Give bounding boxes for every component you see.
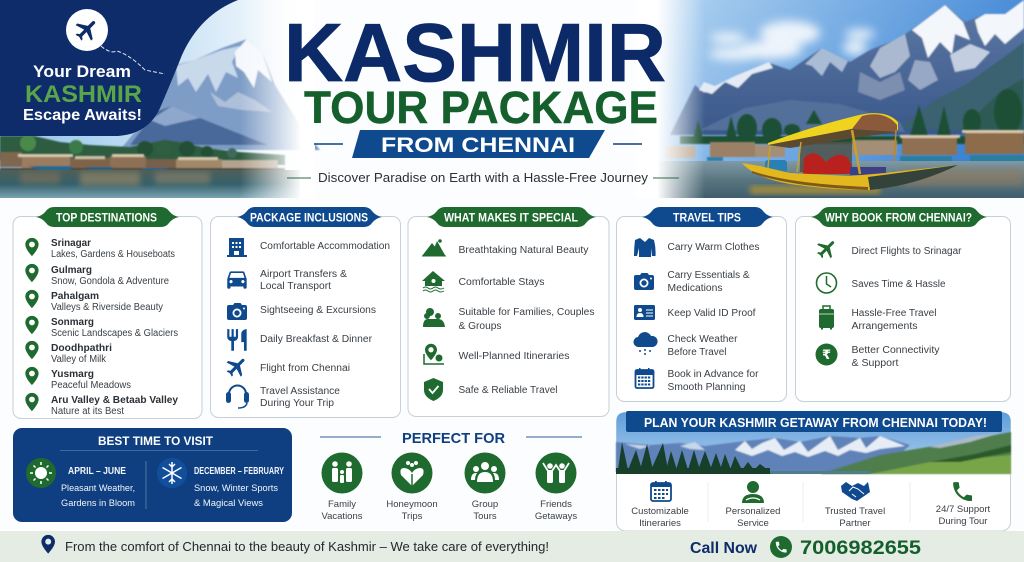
- shikara boat: [742, 113, 958, 190]
- panel: best time to visit: [13, 428, 292, 522]
- icon: plane: [813, 235, 840, 262]
- season: december to february: [194, 466, 284, 509]
- audience: friends getaways: Friends: [540, 499, 572, 510]
- panel: package inclusions: Local Transport: [260, 281, 331, 292]
- panel: what makes it special: Safe & Reliable Travel: [458, 385, 558, 396]
- heading: what makes it special: [427, 207, 596, 227]
- panel: package inclusions: [210, 207, 400, 418]
- panel: what makes it special: Breathtaking Natural Beauty: [458, 245, 588, 256]
- panel: travel tips: Before Travel: [668, 347, 726, 358]
- heading: package inclusions: [237, 207, 382, 227]
- banner heading: [626, 411, 1002, 432]
- destination list: Sonmarg: [51, 316, 94, 328]
- icon: car: [227, 271, 247, 289]
- panel: why book from Chennai: Better Connectivity: [852, 345, 940, 356]
- call to action: [690, 536, 921, 559]
- tree line: [0, 135, 285, 165]
- panel: travel tips: Check Weather: [668, 334, 738, 345]
- heading: perfect for: PERFECT FOR: [402, 430, 505, 447]
- destination list: Pahalgam: [51, 290, 99, 302]
- panel: plan your getaway: [616, 411, 1011, 531]
- footer bar: [0, 531, 1024, 562]
- destination list: Valleys & Riverside Beauty: [51, 302, 163, 313]
- heading: top destinations: [36, 207, 179, 227]
- panel: travel tips: Carry Warm Clothes: [668, 242, 760, 253]
- feature: customizable itineraries: Itineraries: [639, 518, 681, 529]
- panel: package inclusions: Comfortable Accommodation: [260, 241, 390, 252]
- destination list: Nature at its Best: [51, 406, 124, 417]
- season: december to february: & Magical Views: [194, 498, 263, 509]
- tagline: Discover Paradise on Earth with a Hassle-Free Journey: [318, 171, 649, 185]
- banner heading: PLAN YOUR KASHMIR GETAWAY FROM CHENNAI TODAY!: [644, 415, 987, 430]
- heading: best time: BEST TIME TO VISIT: [98, 436, 213, 448]
- audience: friends getaways: [535, 452, 577, 522]
- icon: sun: [26, 458, 56, 488]
- icon: snowflake: [157, 458, 187, 488]
- audience: family vacations: Vacations: [321, 511, 363, 522]
- panel: why book from Chennai: Direct Flights to Srinagar: [852, 246, 962, 257]
- icon: jacket: [634, 238, 656, 257]
- panel: what makes it special: Suitable for Families, Couples: [458, 307, 594, 318]
- feature: customizable itineraries: Customizable: [631, 506, 689, 517]
- subtitle ribbon: from Chennai: FROM CHENNAI: [381, 134, 575, 157]
- call to action: 7006982655: [800, 538, 921, 559]
- panel: travel tips: [616, 207, 786, 402]
- destination list: Snow, Gondola & Adventure: [51, 276, 169, 287]
- heading: why book from Chennai: WHY BOOK FROM CHENNAI?: [825, 212, 972, 224]
- icon: shield: [424, 378, 443, 401]
- icon: location pin: [41, 535, 55, 554]
- season: april to june: Gardens in Bloom: [61, 498, 135, 509]
- panel: why book from Chennai: Saves Time & Hassle: [852, 279, 946, 290]
- lake: [0, 170, 310, 198]
- panel: why book from Chennai: Hassle-Free Travel: [852, 308, 936, 319]
- audience: family vacations: Family: [328, 499, 356, 510]
- panel: travel tips: Carry Essentials &: [668, 270, 750, 281]
- icon: weather cloud: [633, 332, 658, 355]
- feature: personalized service: [726, 481, 780, 529]
- feature: 24/7 support: During Tour: [939, 516, 987, 527]
- feature: personalized service: Service: [737, 518, 769, 529]
- heading: what makes it special: WHAT MAKES IT SPECIAL: [444, 212, 578, 224]
- left scenery: mountain and lake: [0, 0, 320, 198]
- trees: [680, 89, 1024, 144]
- icon: cutlery: [227, 329, 247, 351]
- panel: what makes it special: & Groups: [458, 321, 502, 332]
- destination list: Valley of Milk: [51, 354, 107, 365]
- panel: travel tips: Medications: [668, 283, 722, 294]
- icon: hotel: [227, 238, 247, 257]
- title: KASHMIR: [284, 6, 666, 99]
- season: april to june: [61, 466, 135, 509]
- icon: house on water: [422, 271, 445, 292]
- feature: trusted travel partner: Trusted Travel: [825, 506, 885, 517]
- panel: why book from Chennai: Arrangements: [852, 321, 918, 332]
- dashed flight path: [101, 46, 165, 74]
- icon: map pin planning: [424, 344, 444, 364]
- navy corner badge: [0, 0, 238, 136]
- feature: trusted travel partner: [825, 482, 885, 529]
- heading: package inclusions: PACKAGE INCLUSIONS: [250, 212, 368, 224]
- icon: rupee: [816, 344, 838, 366]
- panel: travel tips: Book in Advance for: [668, 369, 759, 380]
- heading: travel tips: TRAVEL TIPS: [673, 212, 741, 224]
- destination list: Yusmarg: [51, 368, 94, 380]
- feature: 24/7 support: [936, 482, 991, 527]
- icon: suitcase: [819, 306, 834, 330]
- audience: group tours: [464, 452, 506, 522]
- icon: ID card: [634, 305, 655, 320]
- audience: honeymoon trips: Honeymoon: [386, 499, 438, 510]
- feature: customizable itineraries: [631, 481, 689, 529]
- icon: camera: [227, 303, 247, 320]
- destination list: Srinagar: [51, 237, 91, 249]
- icon: mountains: [422, 239, 446, 256]
- destination list: Doodhpathri: [51, 342, 112, 354]
- lake water: [640, 161, 1024, 198]
- audience: honeymoon trips: Trips: [402, 511, 423, 522]
- landscape photo strip: [616, 412, 1011, 474]
- destination list: [25, 237, 178, 417]
- icon: airplane in circle: [66, 9, 108, 51]
- audience: friends getaways: Getaways: [535, 511, 577, 522]
- destination list: Lakes, Gardens & Houseboats: [51, 249, 175, 260]
- panel: why book from Chennai: [796, 207, 1010, 402]
- panel: what makes it special: [408, 207, 609, 416]
- season: december to february: DECEMBER – FEBRUARY: [194, 466, 284, 477]
- panel: package inclusions: Daily Breakfast & Dinner: [260, 334, 373, 345]
- houseboats: [0, 152, 285, 171]
- season: april to june: Pleasant Weather,: [61, 483, 135, 494]
- destination list: Scenic Landscapes & Glaciers: [51, 328, 178, 339]
- destination list: Peaceful Meadows: [51, 380, 131, 391]
- icon: rupee: ₹: [822, 348, 831, 363]
- audience: group tours: Group: [472, 499, 498, 510]
- clouds: [709, 21, 875, 60]
- heading: top destinations: TOP DESTINATIONS: [56, 212, 157, 224]
- right scenery: mountains, clouds, houseboats: [636, 0, 1024, 198]
- icon: headset: [226, 386, 249, 408]
- icon: clock: [816, 273, 836, 293]
- heading: travel tips: [642, 207, 773, 227]
- houseboat row: [665, 130, 1024, 164]
- destination list: Aru Valley & Betaab Valley: [51, 394, 178, 406]
- audience: family vacations: [321, 452, 363, 522]
- subtitle ribbon: from Chennai: [314, 130, 642, 158]
- heading: why book from Chennai: [811, 207, 987, 227]
- panel: package inclusions: Flight from Chennai: [260, 363, 350, 374]
- panel: package inclusions: Travel Assistance: [260, 386, 340, 397]
- panel: travel tips: Smooth Planning: [668, 382, 746, 393]
- badge text: Your Dream: [33, 63, 131, 81]
- icon: calendar: [635, 368, 654, 388]
- panel: why book from Chennai: & Support: [852, 358, 899, 369]
- feature: 24/7 support: 24/7 Support: [936, 504, 991, 515]
- panel: top destinations: [13, 207, 202, 418]
- audience: group tours: Tours: [473, 511, 497, 522]
- panel: package inclusions: Sightseeing & Excursions: [260, 305, 376, 316]
- icon: plane: [222, 352, 251, 381]
- panel: package inclusions: Airport Transfers &: [260, 269, 347, 280]
- panel: travel tips: Keep Valid ID Proof: [668, 308, 756, 319]
- panel: what makes it special: Well-Planned Itineraries: [458, 351, 570, 362]
- feature: trusted travel partner: Partner: [839, 518, 871, 529]
- panel: what makes it special: Comfortable Stays: [458, 277, 544, 288]
- badge text: [23, 63, 142, 124]
- footer message: From the comfort of Chennai to the beauty of Kashmir – We take care of everything!: [65, 539, 549, 554]
- badge text: KASHMIR: [25, 81, 142, 108]
- icon: camera: [634, 273, 654, 290]
- destination list: Gulmarg: [51, 264, 92, 276]
- pine trees: [616, 442, 770, 474]
- season: december to february: Snow, Winter Sports: [194, 483, 278, 494]
- season: april to june: APRIL – JUNE: [68, 466, 126, 477]
- icon: group of people: [423, 308, 445, 327]
- title: TOUR PACKAGE: [304, 82, 658, 133]
- header banner: [0, 0, 1024, 198]
- panel: package inclusions: During Your Trip: [260, 398, 334, 409]
- section: perfect for: [320, 430, 582, 522]
- badge text: Escape Awaits!: [23, 107, 142, 124]
- feature: personalized service: Personalized: [726, 506, 780, 517]
- call to action: Call Now: [690, 540, 758, 557]
- audience: honeymoon trips: [386, 452, 438, 522]
